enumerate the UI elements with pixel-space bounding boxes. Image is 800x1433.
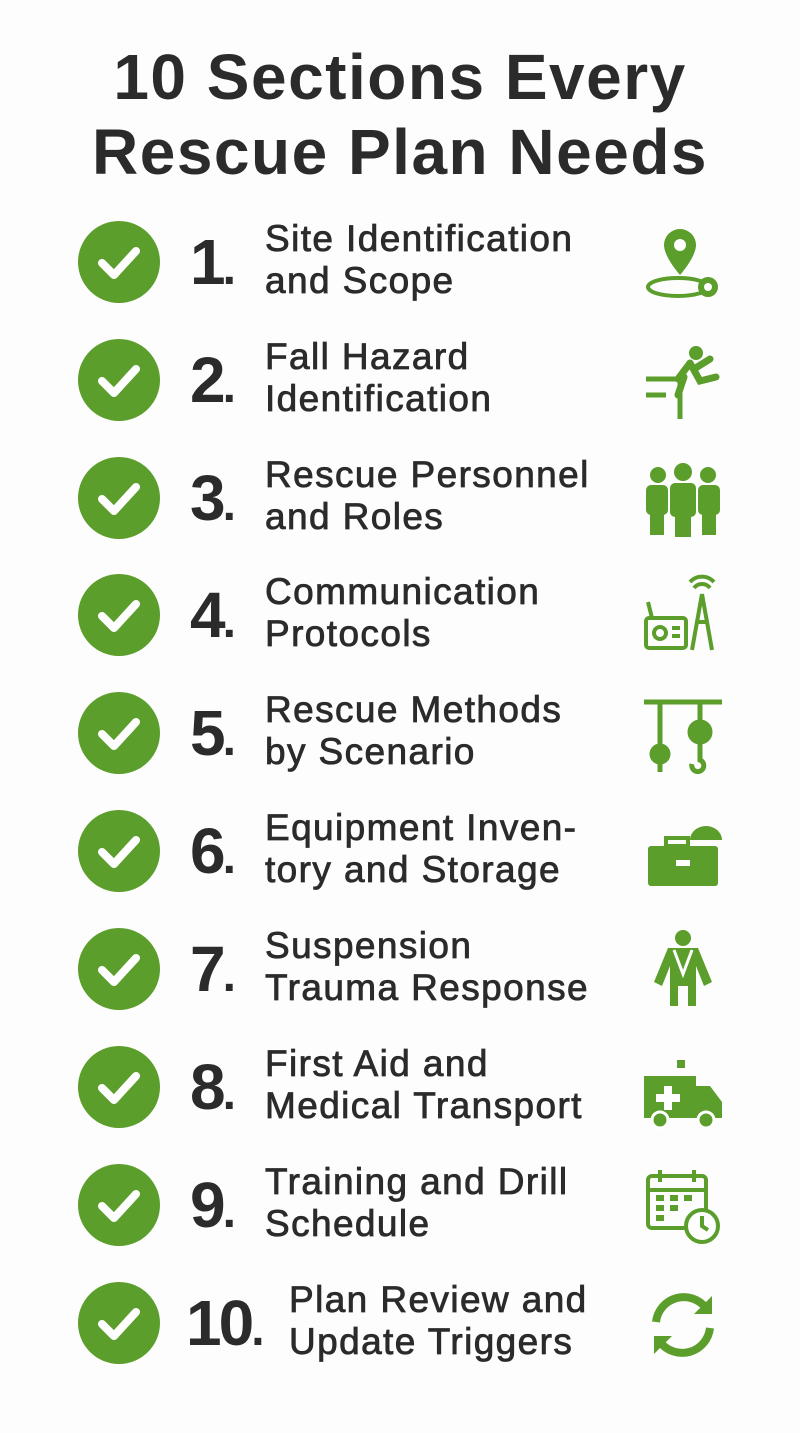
text: Update Triggers: [289, 1321, 573, 1362]
text: [265, 807, 577, 890]
number: 7.: [190, 933, 236, 1005]
icon: check: [78, 1046, 160, 1128]
icon: check: [78, 339, 160, 421]
number: 3.: [190, 462, 236, 534]
icon: ambulance: [644, 1060, 722, 1126]
icon: location gear: [646, 229, 718, 298]
text: Rescue Methods: [265, 689, 562, 730]
row 9: [78, 1161, 720, 1246]
row 10: [78, 1279, 714, 1364]
text: Trauma Response: [265, 967, 589, 1008]
icon: pulley: [644, 700, 722, 774]
icon: check: [78, 574, 160, 656]
icon: people: [646, 463, 720, 537]
icon: check: [78, 928, 160, 1010]
row 4: [78, 571, 716, 656]
text: [265, 1161, 568, 1244]
row 8: [78, 1043, 722, 1128]
text: Communication: [265, 571, 540, 612]
row 2: [78, 336, 720, 421]
text: [265, 689, 562, 772]
number: 4.: [190, 579, 236, 651]
text: Medical Transport: [265, 1085, 583, 1126]
text: [265, 571, 540, 654]
icon: check: [78, 457, 160, 539]
title: [92, 41, 708, 188]
text: and Roles: [265, 496, 444, 537]
title: Rescue Plan Needs: [92, 116, 708, 188]
text: Suspension: [265, 925, 472, 966]
row 5: [78, 689, 722, 774]
icon: check: [78, 692, 160, 774]
icon: calendar clock: [646, 1170, 720, 1244]
row 6: [78, 807, 722, 892]
row 3: [78, 454, 720, 539]
text: Training and Drill: [265, 1161, 568, 1202]
text: Protocols: [265, 613, 432, 654]
text: [289, 1279, 588, 1362]
row 1: [78, 218, 718, 303]
number: 10.: [186, 1287, 265, 1359]
number: 6.: [190, 815, 236, 887]
number: 2.: [190, 344, 236, 416]
text: [265, 218, 573, 301]
text: Fall Hazard: [265, 336, 470, 377]
icon: check: [78, 810, 160, 892]
text: by Scenario: [265, 731, 476, 772]
icon: harness: [654, 930, 712, 1006]
text: Site Identification: [265, 218, 573, 259]
text: First Aid and: [265, 1043, 489, 1084]
text: and Scope: [265, 260, 455, 301]
number: 9.: [190, 1169, 236, 1241]
text: Identification: [265, 378, 492, 419]
text: Schedule: [265, 1203, 430, 1244]
text: [265, 925, 589, 1008]
text: [265, 336, 492, 419]
icon: radio tower: [644, 574, 716, 650]
row 7: [78, 925, 712, 1010]
icon: check: [78, 1282, 160, 1364]
text: tory and Storage: [265, 849, 561, 890]
text: [265, 1043, 583, 1126]
icon: toolbox helmet: [648, 826, 722, 886]
text: [265, 454, 590, 537]
number: 8.: [190, 1051, 236, 1123]
text: Rescue Personnel: [265, 454, 590, 495]
title: 10 Sections Every: [113, 41, 687, 113]
icon: check: [78, 221, 160, 303]
number: 1.: [190, 226, 236, 298]
icon: refresh: [640, 1282, 726, 1368]
text: Equipment Inven-: [265, 807, 577, 848]
text: Plan Review and: [289, 1279, 588, 1320]
number: 5.: [190, 697, 236, 769]
icon: falling person: [646, 346, 720, 419]
icon: check: [78, 1164, 160, 1246]
